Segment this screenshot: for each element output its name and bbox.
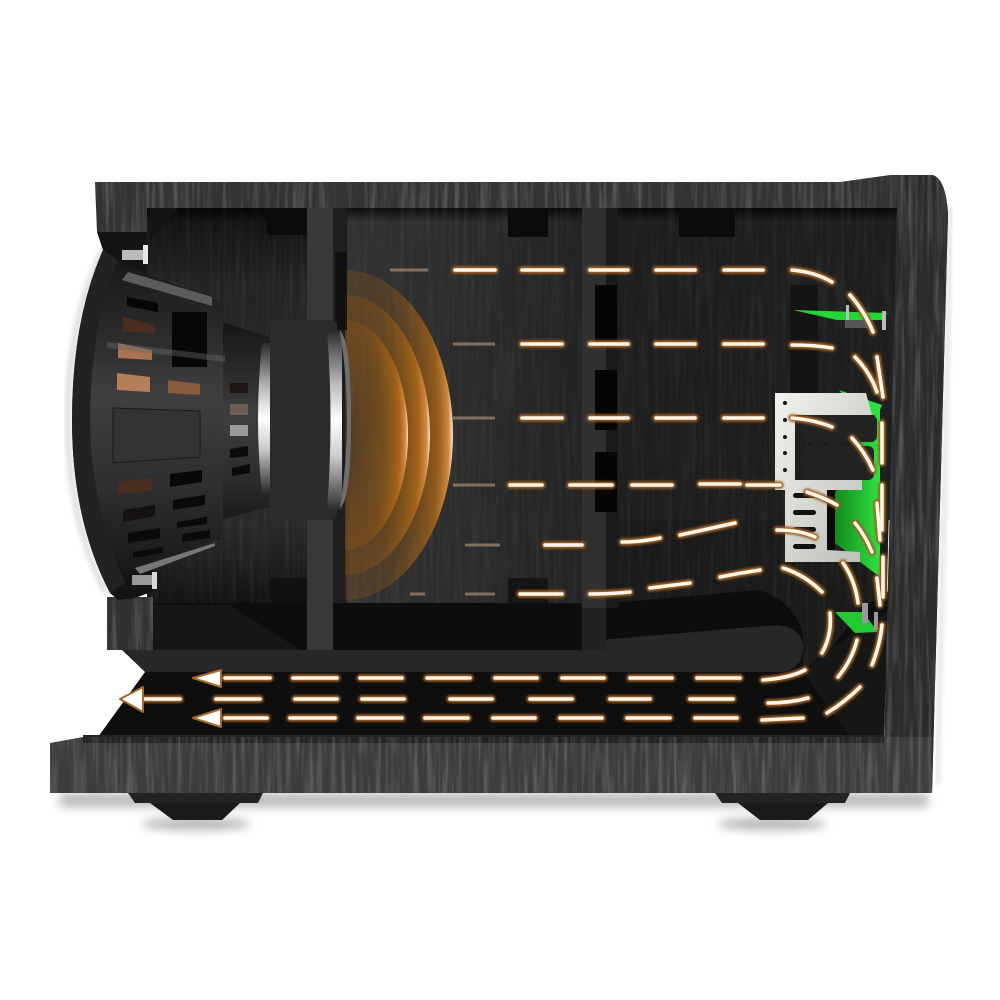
sound waves xyxy=(335,252,453,600)
wooden cabinet shell xyxy=(40,170,960,810)
lower circuit board xyxy=(835,603,878,633)
subwoofer driver xyxy=(72,232,351,600)
chassis holes xyxy=(783,401,816,549)
left foot xyxy=(128,793,263,820)
amplifier plate xyxy=(775,390,882,577)
top mounting screw xyxy=(122,245,148,264)
capacitors xyxy=(802,415,877,480)
dark cavity behind plate xyxy=(827,490,835,550)
cabinet drop shadows xyxy=(60,205,951,830)
vertical braces xyxy=(307,205,618,650)
faint leading dashes xyxy=(390,270,500,594)
basket slots xyxy=(117,297,250,558)
pole plate xyxy=(340,331,351,508)
upper basket ridge xyxy=(122,272,212,306)
green amp board xyxy=(835,405,880,577)
silver chassis xyxy=(775,393,872,562)
mounting flange xyxy=(97,232,157,600)
magnet xyxy=(270,320,337,520)
floor panel and resonance channel xyxy=(98,590,890,737)
rear silver ring xyxy=(258,343,270,493)
subwoofer cutaway illustration xyxy=(50,175,952,836)
basket label plate xyxy=(113,408,200,463)
front silver ring xyxy=(327,330,342,510)
airflow glow xyxy=(145,270,883,720)
basket sheen xyxy=(107,342,225,362)
interior corner blocks xyxy=(150,208,818,605)
cabinet interior back wall xyxy=(147,208,897,668)
upper circuit board xyxy=(793,305,887,330)
lower basket ridge xyxy=(135,543,215,574)
airflow dashes xyxy=(145,270,883,720)
right foot xyxy=(715,793,850,820)
driver front rim xyxy=(72,250,125,593)
driver frame xyxy=(72,250,223,593)
green amp board top xyxy=(839,390,882,415)
bottom mounting screw xyxy=(132,572,157,589)
driver rear basket xyxy=(217,320,270,540)
exit arrows xyxy=(120,670,221,727)
